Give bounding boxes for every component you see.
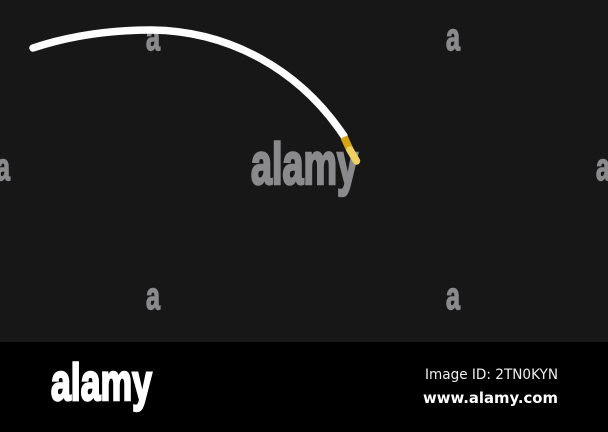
alamy logo: alamy — [51, 354, 152, 412]
gold stroke tip — [344, 137, 356, 161]
dark gold segment — [344, 137, 350, 150]
small watermark letters — [0, 17, 608, 318]
dark background panel — [0, 0, 608, 342]
bottom black banner — [0, 342, 608, 432]
small watermark letters: a — [446, 276, 461, 318]
central alamy watermark: alamy — [251, 132, 358, 197]
small watermark letters: a — [446, 17, 461, 59]
small watermark letters: a — [146, 276, 161, 318]
small watermark letters: a — [146, 17, 161, 59]
light gold end — [350, 150, 356, 161]
white curved stroke — [33, 30, 344, 136]
image id: Image ID: 2TN0KYN — [425, 367, 558, 383]
website url: www.alamy.com — [423, 389, 558, 407]
